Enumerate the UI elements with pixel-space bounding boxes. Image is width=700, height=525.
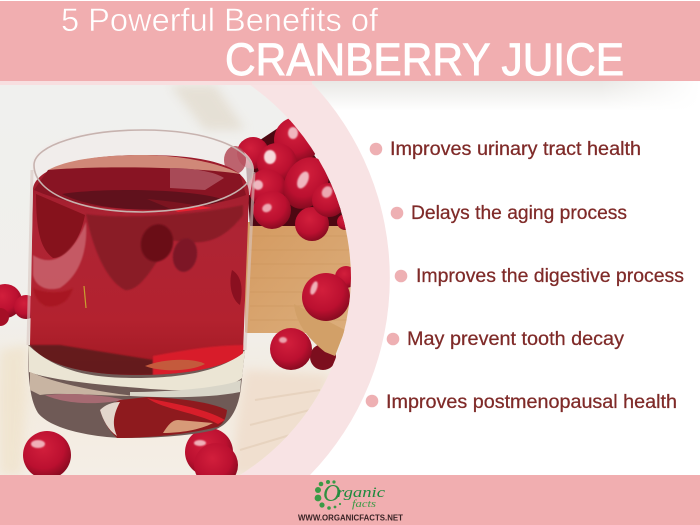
- pale pink circle behind photo: [0, 81, 390, 475]
- letter O: O: [323, 481, 340, 507]
- title line 1: 5 Powerful Benefits of: [61, 2, 378, 38]
- berry seen through rim: [224, 146, 246, 174]
- word facts: facts: [352, 498, 376, 510]
- juice surface: [48, 155, 240, 174]
- photo: cranberry juice glass: [0, 85, 360, 487]
- pale pink strip: [0, 81, 312, 85]
- glass rim: [34, 130, 253, 212]
- title line 2: CRANBERRY JUICE: [225, 34, 624, 85]
- glass base: [28, 345, 245, 438]
- benefit 1: Improves urinary tract health: [390, 139, 641, 160]
- website url: WWW.ORGANICFACTS.NET: [298, 512, 404, 522]
- benefit 4: May prevent tooth decay: [407, 329, 625, 350]
- word rganic: rganic: [337, 485, 385, 501]
- inner red refraction: [100, 397, 227, 438]
- logo: Organic Facts: [315, 480, 385, 510]
- benefit 3: Improves the digestive process: [416, 266, 684, 287]
- background shadow under header: [300, 81, 700, 111]
- berries in bowl: [237, 117, 353, 241]
- juice body: [30, 155, 249, 375]
- wooden bowl: [245, 222, 351, 333]
- table surface: [0, 85, 360, 475]
- benefit 5: Improves postmenopausal health: [386, 392, 677, 413]
- footer band: [0, 475, 700, 525]
- header band: [0, 1, 700, 81]
- loose berries right: [270, 266, 357, 370]
- glass upper wall: [237, 148, 254, 195]
- benefit 2: Delays the aging process: [411, 203, 627, 224]
- glass of juice: [25, 129, 254, 438]
- icon: leaf ring: [315, 480, 341, 510]
- pale ring of glass: [28, 345, 245, 390]
- loose berries bottom and left: [0, 284, 238, 487]
